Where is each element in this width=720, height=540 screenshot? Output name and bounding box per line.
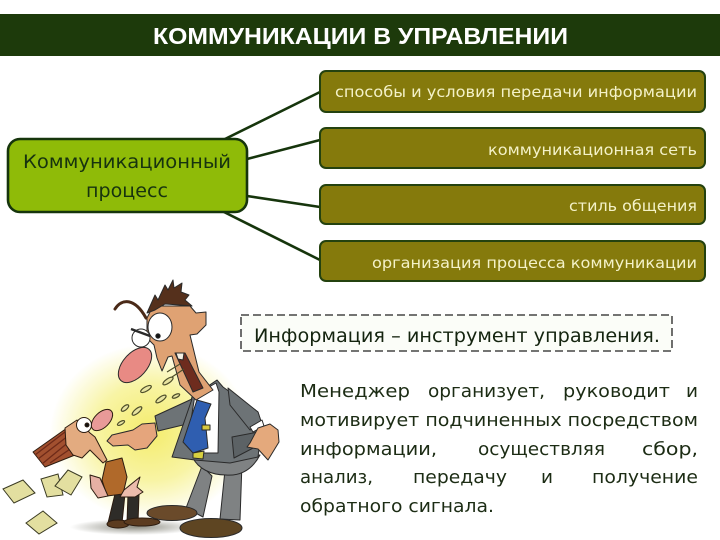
body paragraph: осуществляя bbox=[478, 439, 605, 460]
manager figure bbox=[107, 280, 279, 538]
body paragraph: анализ, bbox=[300, 467, 373, 488]
box: ways and conditions: способы и условия передачи информации bbox=[335, 83, 697, 101]
icon: scattered papers bbox=[3, 470, 82, 534]
body paragraph: Менеджер bbox=[300, 381, 410, 402]
box: organisation of the process bbox=[320, 241, 705, 281]
connector lines bbox=[224, 92, 320, 260]
body paragraph: мотивирует подчиненных посредством bbox=[300, 410, 698, 431]
callout: information is a tool: Информация – инструмент управления. bbox=[254, 325, 660, 347]
body paragraph: передачу bbox=[413, 467, 507, 488]
main box: communication process bbox=[8, 139, 247, 212]
spit droplets bbox=[117, 364, 184, 426]
box: communication network: коммуникационная сеть bbox=[488, 141, 697, 159]
body paragraph: обратного сигнала. bbox=[300, 496, 494, 517]
box: communication style: стиль общения bbox=[569, 197, 697, 215]
callout: information is a tool bbox=[241, 315, 672, 351]
box: communication network bbox=[320, 128, 705, 168]
body paragraph: и bbox=[541, 467, 553, 488]
body paragraph bbox=[300, 381, 698, 517]
title bar: КОММУНИКАЦИИ В УПРАВЛЕНИИ bbox=[153, 23, 568, 49]
body paragraph: и bbox=[686, 381, 698, 402]
main box: communication process: процесс bbox=[86, 180, 168, 202]
title bar bbox=[0, 14, 720, 56]
body paragraph: информации, bbox=[300, 439, 437, 460]
box: ways and conditions bbox=[320, 71, 705, 112]
subordinate figure bbox=[33, 406, 160, 528]
box: organisation of the process: организация процесса коммуникации bbox=[372, 254, 697, 272]
body paragraph: получение bbox=[592, 467, 698, 488]
box: communication style bbox=[320, 185, 705, 224]
illustration: angry manager shouting at subordinate bbox=[3, 280, 279, 538]
main box: communication process: Коммуникационный bbox=[23, 151, 231, 173]
body paragraph: организует, bbox=[428, 381, 545, 402]
body paragraph: руководит bbox=[563, 381, 670, 402]
body paragraph: сбор, bbox=[642, 439, 698, 460]
